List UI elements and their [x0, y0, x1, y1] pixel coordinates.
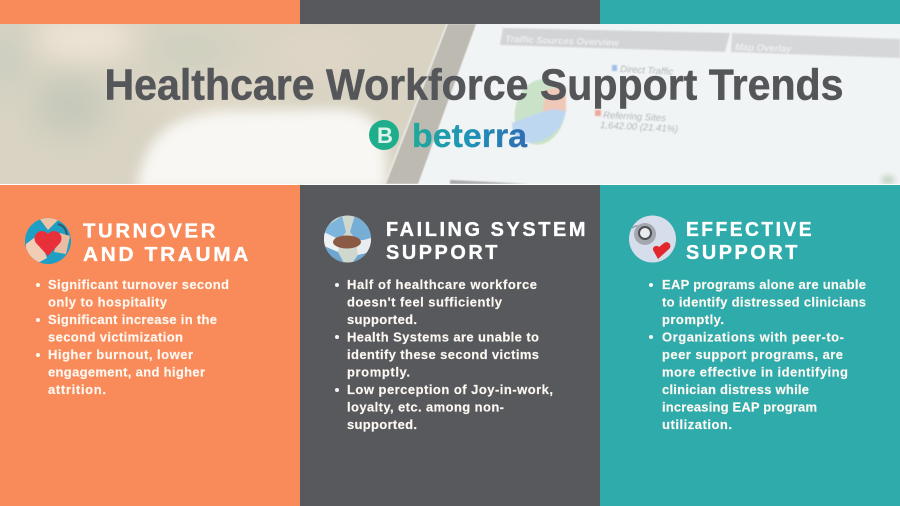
bullet list: Significant increase in the: [48, 312, 217, 327]
heading: [83, 220, 251, 266]
bullet list: promptly.: [662, 312, 724, 327]
header background photo: laptop analytics: Map Overlay: [735, 42, 792, 55]
header background photo: laptop analytics: Direct Traffic: [620, 64, 674, 78]
panel: effective support: [600, 185, 900, 506]
icon: clinicians joining hands: [324, 215, 371, 263]
header background photo: laptop analytics: [0, 16, 900, 190]
logo icon: [369, 120, 399, 150]
heading: EFFECTIVE: [686, 219, 814, 241]
bullet list: second victimization: [48, 330, 183, 344]
bullet list: to identify distressed clinicians: [662, 294, 866, 310]
bullet list: Organizations with peer-to-: [662, 330, 844, 344]
heading: SUPPORT: [686, 242, 800, 264]
top colour band: [0, 0, 900, 24]
bullet list: engagement, and higher: [48, 364, 205, 380]
panel: turnover and trauma: [0, 185, 300, 506]
bullet list: loyalty, etc. among non-: [347, 400, 504, 414]
bullet list: Half of healthcare workforce: [347, 277, 537, 292]
heading: AND TRAUMA: [83, 244, 251, 266]
header background photo: laptop analytics: Referring Sites: [603, 110, 666, 124]
header background photo: laptop analytics: 1,642.00 (21.41%): [600, 120, 678, 135]
heading: [686, 219, 814, 264]
bullet list: [335, 277, 553, 432]
bullet list: EAP programs alone are unable: [662, 277, 866, 292]
logo wordmark: beterra: [412, 117, 528, 154]
bullet list: increasing EAP program: [662, 400, 817, 414]
title: Healthcare Workforce Support Trends: [104, 62, 844, 110]
bullet list: [36, 277, 229, 397]
bullet list: promptly.: [347, 364, 410, 380]
bullet list: utilization.: [662, 417, 732, 432]
bullet list: more effective in identifying: [662, 364, 848, 380]
bullet list: Higher burnout, lower: [48, 347, 193, 362]
bullet list: supported.: [347, 417, 417, 432]
bullet list: supported.: [347, 312, 417, 327]
bullet list: doesn't feel sufficiently: [347, 294, 503, 310]
bullet list: Significant turnover second: [48, 277, 229, 292]
header background photo: laptop analytics: Traffic Sources Overview: [505, 34, 620, 49]
heading: TURNOVER: [83, 220, 218, 242]
bullet list: identify these second victims: [347, 347, 539, 362]
logo icon: B: [377, 123, 393, 148]
icon: hands holding heart: [25, 218, 71, 264]
bullet list: clinician distress while: [662, 382, 809, 397]
bullet list: [649, 277, 866, 432]
bullet list: peer support programs, are: [662, 347, 843, 362]
bullet list: attrition.: [48, 382, 106, 397]
heading: SUPPORT: [386, 242, 500, 264]
bullet list: Health Systems are unable to: [347, 330, 539, 344]
bullet list: Low perception of Joy-in-work,: [347, 382, 553, 397]
heading: [386, 219, 588, 264]
logo: beterra: [369, 117, 528, 154]
icon: stethoscope and heart: [628, 215, 677, 263]
bullet list: only to hospitality: [48, 294, 168, 310]
heading: FAILING SYSTEM: [386, 219, 588, 241]
panel: failing system support: [300, 185, 600, 506]
